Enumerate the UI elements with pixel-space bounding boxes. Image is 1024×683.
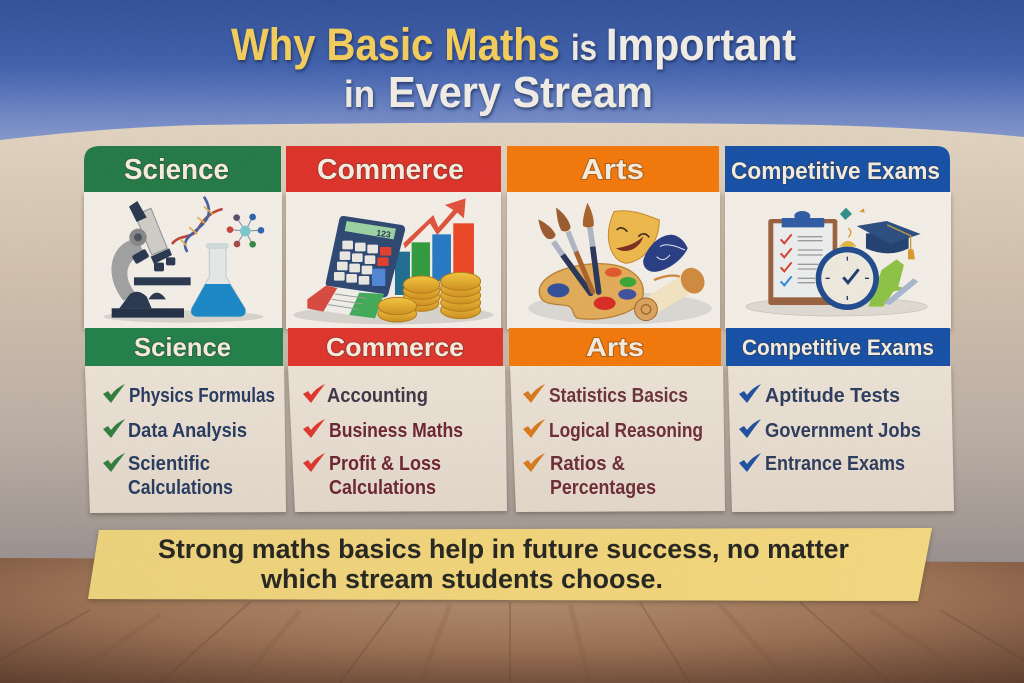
science list paper [85,366,286,513]
commerce list items: Accounting [327,385,428,407]
title: words Every Stream: Every Stream [388,68,653,117]
background: beige wall [0,123,1024,565]
icon: calculator, chart, books and coins [293,198,493,324]
arts list items: Percentages [550,477,656,499]
title: word Important: Important [606,19,796,70]
panel: arts [507,146,725,512]
background: wooden floor [0,558,1024,683]
competitive list paper [728,366,954,512]
commerce top header: Commerce [317,154,464,186]
science top header: Science [124,154,229,186]
science list items [103,384,275,499]
commerce second header [288,328,503,366]
commerce list items [303,384,463,499]
science list items: Data Analysis [128,420,247,442]
title: word in: in [344,74,375,116]
icon: microscope, DNA, molecule and flask [103,197,264,323]
arts top header [507,146,719,192]
callout: bottom banner: which stream students choose. [260,564,663,594]
background: blue sky band [0,0,1024,145]
science list items: Calculations [128,477,233,499]
icon: calculator, chart, books and coins: 123 [376,228,392,240]
commerce second header: Commerce [326,332,464,362]
science list items: Physics Formulas [129,385,275,407]
arts top header: Arts [581,154,644,186]
competitive top header [725,146,950,192]
icon: clipboard, clock and graduation cap [746,208,927,316]
arts list items: Logical Reasoning [549,420,703,442]
panel: science [84,146,286,513]
commerce list items: Business Maths [329,420,463,442]
callout: bottom banner [88,528,932,601]
science top header [84,146,281,192]
science second header: Science [134,332,231,362]
title: highlighted words: Why Basic Maths [231,19,560,70]
arts list items [523,384,703,499]
competitive image area [725,192,951,329]
competitive list items: Government Jobs [765,420,921,442]
commerce top header [286,146,501,192]
title: word is: is [571,27,597,68]
competitive list items [739,384,921,475]
competitive list items: Entrance Exams [765,453,905,475]
arts second header: Arts [586,332,644,362]
title [231,19,796,117]
science list items: Scientific [128,453,210,475]
arts list items: Ratios & [550,453,625,475]
competitive second header [726,328,950,366]
commerce list paper [288,366,507,512]
callout: bottom banner: Strong maths basics help in future success, no matter [158,534,849,564]
commerce list items: Calculations [329,477,436,499]
DNA strands [172,209,223,244]
arts list paper [510,366,725,512]
arts image area [507,192,720,329]
competitive top header: Competitive Exams [731,158,940,185]
competitive second header: Competitive Exams [742,335,934,360]
competitive list items: Aptitude Tests [765,385,900,407]
arts list items: Statistics Basics [549,385,688,407]
science second header [85,328,283,366]
arts second header [509,328,721,366]
panel: competitive exams [725,146,954,512]
icon: palette, brushes, masks and scroll [528,203,712,324]
commerce image area [286,192,501,329]
science image area [84,192,282,329]
panel: commerce [286,146,507,512]
commerce list items: Profit & Loss [329,453,441,475]
